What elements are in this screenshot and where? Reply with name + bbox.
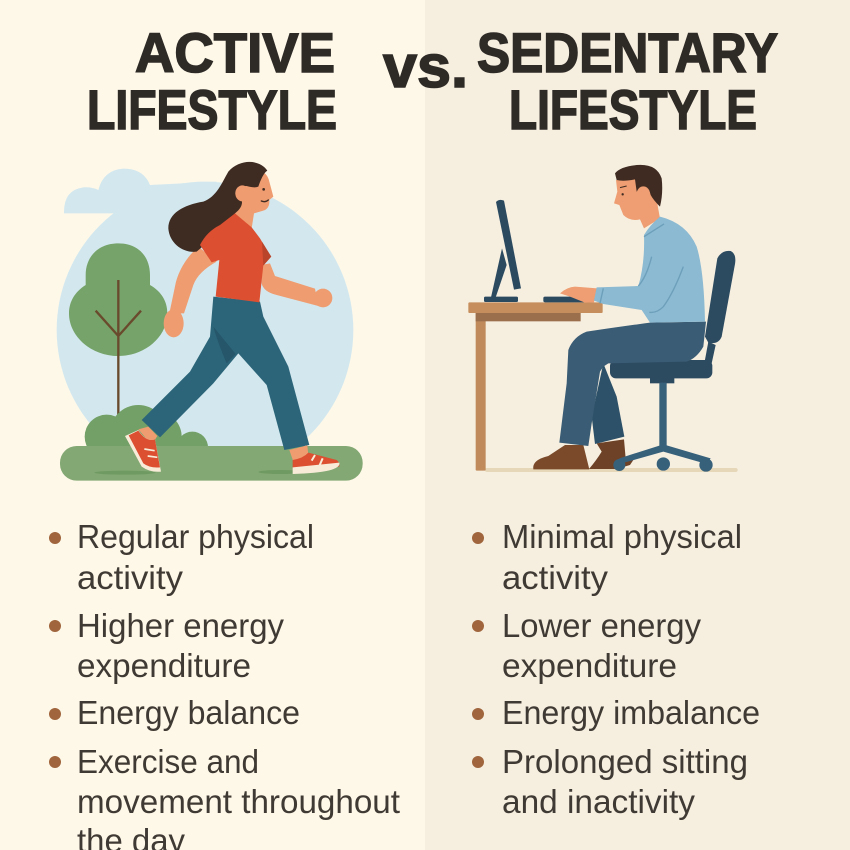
- list: active traits: Regular physical: [77, 518, 314, 555]
- ear: [637, 186, 650, 202]
- list: active traits: Energy balance: [77, 694, 300, 731]
- sky circle: [57, 182, 353, 478]
- illustration: woman walking in a park: [57, 162, 363, 481]
- shirt: [200, 213, 271, 302]
- panel: sedentary lifestyle: [425, 0, 850, 850]
- heading: vs.: vs.: [383, 33, 468, 100]
- shirt: [594, 217, 705, 323]
- list: sedentary traits: and inactivity: [502, 783, 696, 820]
- hand: [560, 287, 597, 303]
- illustration: man sitting at a computer: [468, 165, 738, 472]
- list: sedentary traits: Lower energy: [502, 607, 701, 644]
- floor line: [485, 468, 738, 472]
- shoe: rear: [125, 430, 161, 472]
- chair: [610, 251, 735, 383]
- face details: [620, 186, 627, 195]
- keyboard: [543, 297, 585, 302]
- list: sedentary traits: Prolonged sitting: [502, 743, 748, 780]
- bushes: [85, 405, 208, 463]
- heading: active lifestyle: LIFESTYLE: [87, 78, 337, 141]
- ankles: [138, 427, 308, 462]
- heading: sedentary lifestyle: LIFESTYLE: [509, 78, 757, 141]
- front leg: [559, 322, 706, 446]
- heading: sedentary lifestyle: SEDENTARY: [477, 21, 778, 84]
- list: sedentary traits: Minimal physical: [502, 518, 742, 555]
- list: active traits: Higher energy: [77, 607, 284, 644]
- ear: [235, 185, 249, 201]
- rear arm: [164, 247, 217, 337]
- shoe: front: [293, 453, 339, 474]
- heading: active lifestyle: ACTIVE: [135, 21, 335, 84]
- list: sedentary traits: [472, 518, 760, 820]
- list: active traits: Exercise and: [77, 743, 259, 780]
- list: sedentary traits: activity: [502, 559, 609, 596]
- hair: [168, 162, 267, 252]
- list: active traits: activity: [77, 559, 184, 596]
- list: active traits: expenditure: [77, 647, 251, 684]
- cloud: [64, 169, 217, 213]
- forward arm: [262, 263, 332, 307]
- list: active traits: [49, 518, 400, 850]
- face details: [261, 189, 268, 202]
- list: sedentary traits: Energy imbalance: [502, 694, 760, 731]
- ground: [60, 446, 363, 481]
- list: active traits: movement throughout: [77, 783, 400, 820]
- rear shoe: [589, 439, 633, 469]
- pants: [142, 297, 309, 450]
- list: sedentary traits: expenditure: [502, 647, 677, 684]
- tree: [69, 243, 167, 423]
- chair base: [613, 383, 713, 472]
- ground shadows: [94, 470, 302, 475]
- heading: active lifestyle: [87, 21, 337, 141]
- front shoe: [533, 445, 589, 469]
- rear leg: [592, 363, 624, 444]
- heading: sedentary lifestyle: [477, 21, 778, 141]
- desk: [468, 302, 603, 471]
- hair: [615, 165, 662, 207]
- head and neck: [232, 170, 273, 228]
- monitor: [484, 200, 521, 302]
- head and neck: [614, 178, 660, 228]
- panel: active lifestyle: [0, 0, 425, 850]
